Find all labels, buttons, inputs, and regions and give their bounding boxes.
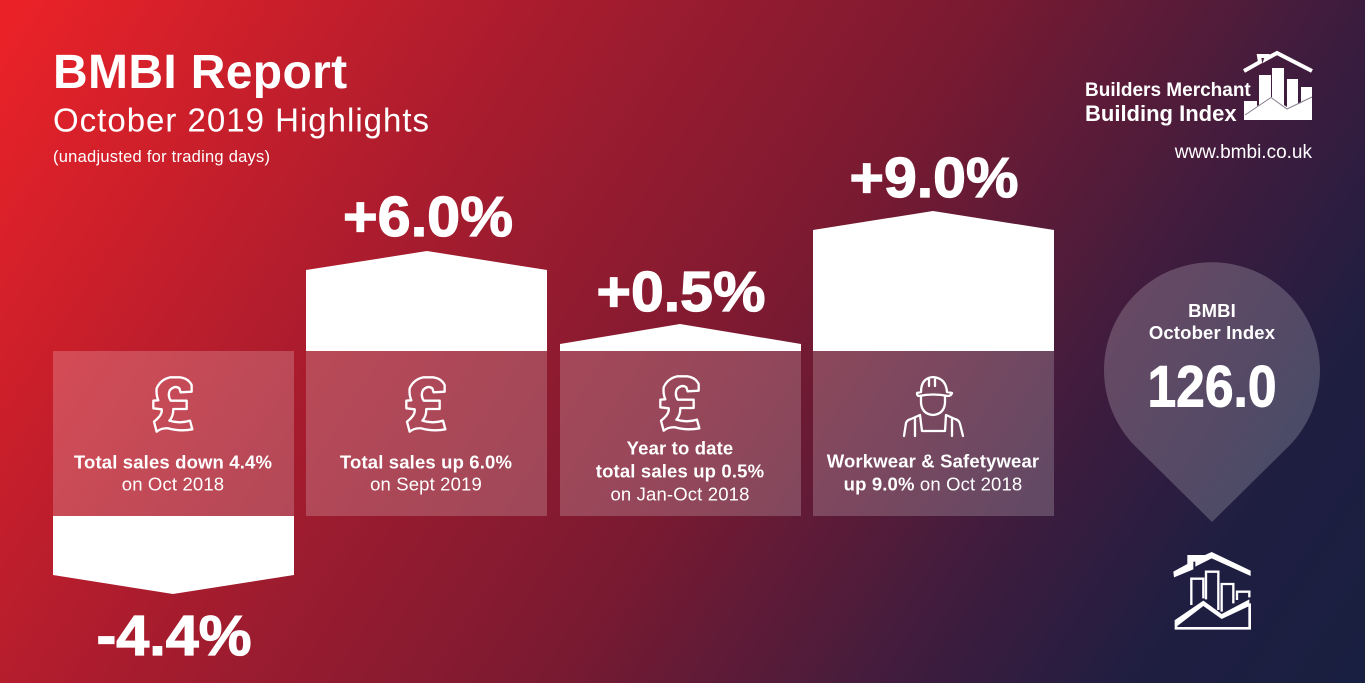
pin label second line: October Index bbox=[1149, 322, 1276, 343]
panel: workwear bbox=[813, 351, 1054, 516]
title: BMBI Report bbox=[53, 46, 348, 99]
panel text: Total sales down 4.4% bbox=[74, 452, 272, 472]
panel text second line: on Sept 2019 bbox=[370, 474, 482, 494]
panel: total sales up bbox=[306, 351, 547, 516]
bar: year to date: +0.5% bbox=[596, 260, 766, 324]
panel text: Year to date bbox=[627, 438, 733, 458]
bar: total sales up: +6.0% bbox=[343, 185, 513, 249]
icon: pound bbox=[153, 377, 192, 432]
logo bbox=[1085, 53, 1312, 163]
panel: total sales down bbox=[53, 351, 294, 516]
bar: workwear bbox=[813, 146, 1054, 351]
note: (unadjusted for trading days) bbox=[53, 148, 270, 166]
bar: workwear: +9.0% bbox=[850, 146, 1018, 210]
index pin callout bbox=[1104, 262, 1320, 522]
panel text second line: on Oct 2018 bbox=[122, 474, 224, 494]
bar: total sales up bbox=[306, 185, 547, 351]
website: www.bmbi.co.uk bbox=[1174, 142, 1312, 163]
panel text second line: up 9.0% on Oct 2018 bbox=[844, 474, 1022, 494]
bar: year to date bbox=[560, 260, 801, 351]
index value: 126.0 bbox=[1148, 354, 1276, 420]
bar: total sales down bbox=[53, 516, 294, 668]
bar chart bbox=[53, 146, 1054, 668]
title block bbox=[53, 46, 430, 166]
icon: pound bbox=[406, 377, 445, 432]
bar: total sales down: -4.4% bbox=[96, 604, 252, 668]
logo wordmark: Builders Merchant bbox=[1085, 80, 1251, 101]
logo wordmark second line: Building Index bbox=[1085, 101, 1237, 126]
panel text: Workwear & Safetywear bbox=[827, 450, 1039, 472]
panel text third line: on Jan-Oct 2018 bbox=[610, 484, 750, 504]
subtitle: October 2019 Highlights bbox=[53, 102, 430, 138]
pin label: BMBI bbox=[1188, 300, 1236, 321]
logo house icon bbox=[1244, 53, 1312, 120]
icon: worker bbox=[904, 377, 963, 436]
icon: pound bbox=[660, 376, 699, 431]
panel text: Total sales up 6.0% bbox=[340, 452, 512, 472]
icon: house with chart bbox=[1173, 552, 1251, 628]
panel: year to date bbox=[560, 351, 801, 516]
panel text second line: total sales up 0.5% bbox=[596, 460, 764, 482]
